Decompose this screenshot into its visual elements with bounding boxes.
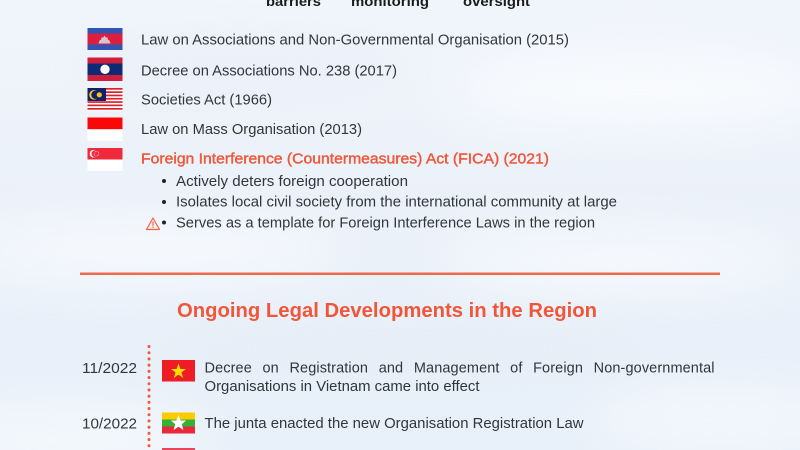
icon: next flag cut off at bottom: [162, 448, 195, 450]
FICA bullet list: [162, 174, 617, 232]
event: Vietnam decree: Organisations in Vietnam came into effect: [204, 379, 480, 395]
icon: Singapore flag: [88, 148, 122, 171]
law: Laos: Decree on Associations No. 238 (2017): [141, 64, 397, 80]
icon: Malaysia flag: [88, 88, 122, 111]
date: 11/2022: 11/2022: [82, 361, 137, 377]
event: Vietnam decree: [204, 360, 714, 395]
FICA bullet list: Isolates local civil society from the international community at large: [176, 194, 617, 210]
FICA bullet list: Serves as a template for Foreign Interference Laws in the region: [176, 216, 595, 232]
icon: Laos flag: [88, 58, 122, 81]
law: Malaysia: Societies Act (1966): [141, 92, 272, 108]
icon: Cambodia flag: [88, 28, 122, 50]
section heading: Ongoing Legal Developments in the Region: [177, 300, 597, 322]
FICA bullet list: Actively deters foreign cooperation: [176, 174, 408, 190]
date: 10/2022: 10/2022: [82, 416, 137, 432]
law: Cambodia: Law on Associations and Non-Governmental Organisation (2015): [141, 32, 569, 48]
event: Myanmar law: The junta enacted the new Organisation Registration Law: [204, 416, 584, 432]
icon: warning triangle: [146, 218, 160, 230]
timeline dotted line: [148, 346, 150, 450]
column labels cut off at top: [266, 0, 530, 9]
icon: Myanmar flag: [162, 412, 195, 434]
icon: Indonesia flag: [88, 118, 122, 141]
divider: [80, 272, 720, 275]
law: Indonesia: Law on Mass Organisation (2013): [141, 122, 362, 138]
law: Singapore FICA heading: Foreign Interference (Countermeasures) Act (FICA) (2021): [141, 152, 549, 168]
event: Vietnam decree: Decree on Registration and Management of Foreign Non-governmental: [204, 360, 714, 376]
icon: Vietnam flag: [162, 360, 195, 382]
